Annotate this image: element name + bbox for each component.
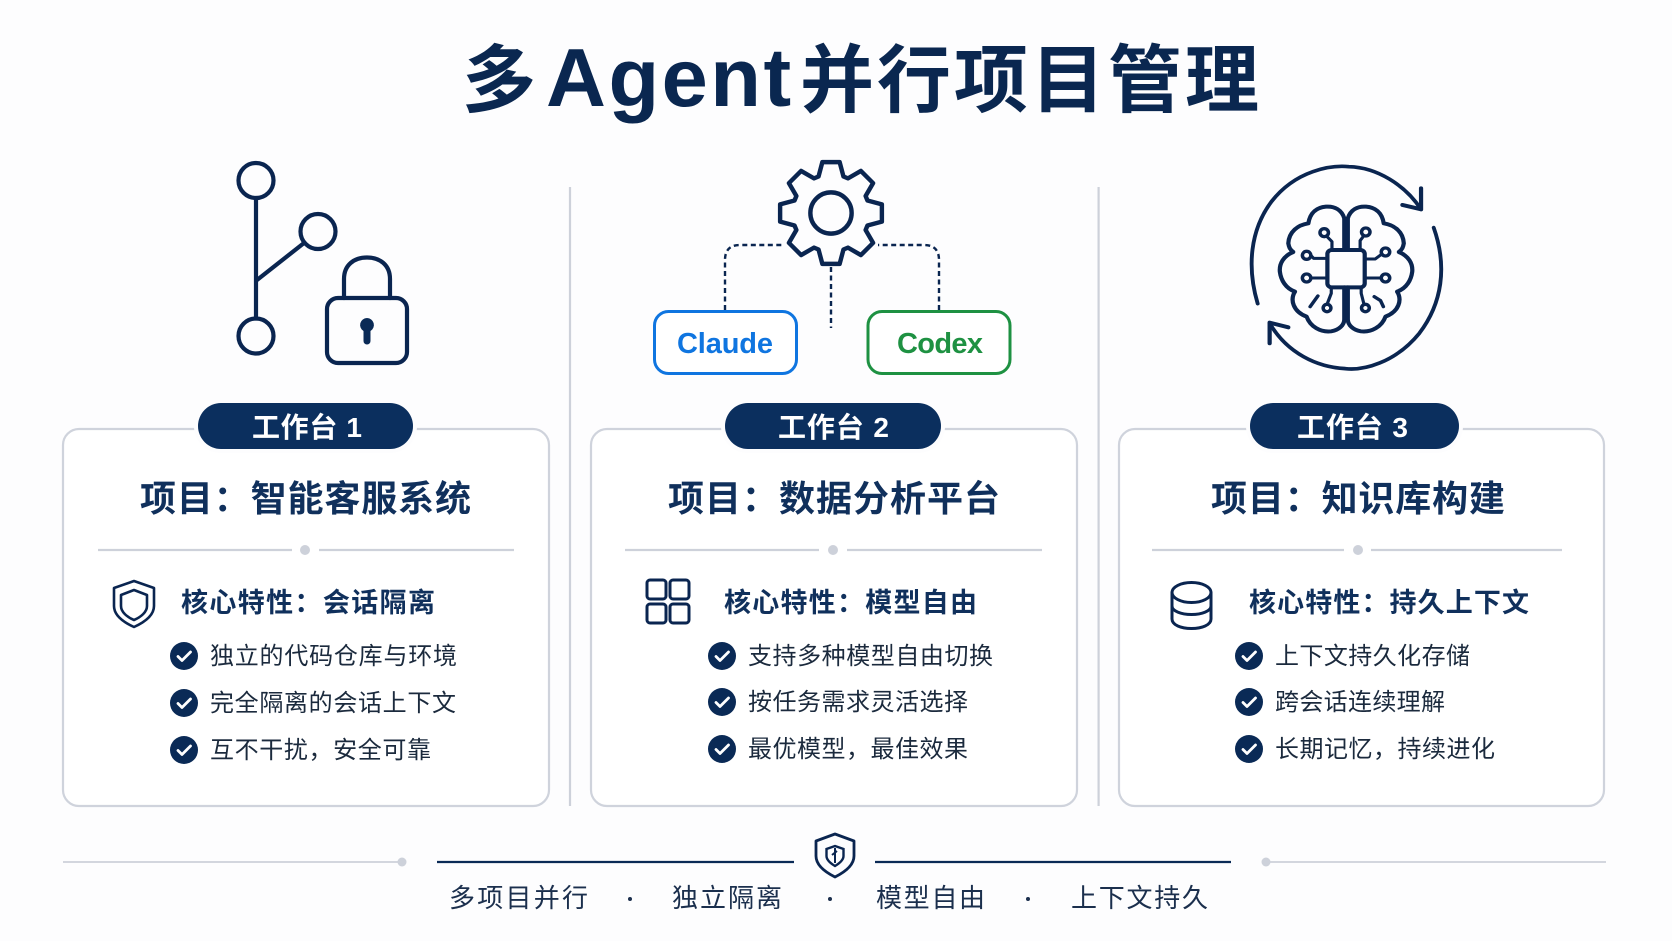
box: Claude xyxy=(654,312,796,374)
badge: workstation 1: 工作台 1 xyxy=(252,411,362,443)
title xyxy=(462,31,1259,124)
badge: workstation 2: 工作台 2 xyxy=(778,411,889,443)
feature list: 支持多种模型自由切换 xyxy=(748,643,993,670)
gear xyxy=(780,162,882,264)
badge: workstation 3 xyxy=(1250,403,1459,449)
icon: grid xyxy=(647,580,689,623)
title: 多 xyxy=(462,39,536,122)
column divider: right xyxy=(1097,187,1100,806)
panel: workstation 1 xyxy=(63,403,549,806)
column divider: left xyxy=(569,187,571,806)
badge: workstation 1 xyxy=(198,403,413,449)
feature list xyxy=(1235,642,1495,763)
footer xyxy=(63,834,1606,913)
feature list xyxy=(708,642,993,763)
feature list xyxy=(170,642,457,764)
feature list: 跨会话连续理解 xyxy=(1275,689,1445,716)
footer keywords: 上下文持久 xyxy=(1071,883,1208,913)
box: Codex: Codex xyxy=(897,328,983,360)
footer keywords: 模型自由 xyxy=(876,883,985,913)
icon: footer shield xyxy=(816,834,854,877)
panel: workstation 2 xyxy=(591,403,1077,806)
project title: 项目：智能客服系统 xyxy=(140,478,471,519)
feature list: 完全隔离的会话上下文 xyxy=(210,690,456,717)
feature list: 按任务需求灵活选择 xyxy=(748,689,968,716)
footer keywords: 独立隔离 xyxy=(672,883,782,913)
dashed connectors xyxy=(725,245,939,328)
icon: gear connected to models xyxy=(654,162,1010,374)
box: Codex xyxy=(868,312,1010,374)
icon: brain chip with cycle arrows xyxy=(1252,166,1441,369)
title: Agent xyxy=(546,31,794,124)
box: Claude: Claude xyxy=(677,328,773,360)
project title: 项目：数据分析平台 xyxy=(668,478,1000,519)
feature list: 互不干扰，安全可靠 xyxy=(210,737,431,764)
badge: workstation 2 xyxy=(725,403,941,449)
icon: git branch with padlock xyxy=(238,163,407,363)
icon: shield xyxy=(114,581,154,627)
feature heading: 核心特性：持久上下文 xyxy=(1249,588,1529,618)
footer keywords xyxy=(449,883,1208,913)
feature heading: 核心特性：会话隔离 xyxy=(181,588,435,618)
feature list: 独立的代码仓库与环境 xyxy=(210,643,457,670)
project title: 项目：知识库构建 xyxy=(1211,478,1505,519)
badge: workstation 3: 工作台 3 xyxy=(1297,411,1408,443)
feature heading: 核心特性：模型自由 xyxy=(724,588,977,618)
panel: workstation 3 xyxy=(1119,403,1604,806)
footer keywords: 多项目并行 xyxy=(449,883,588,913)
title: 并行项目管理 xyxy=(800,39,1259,122)
feature list: 上下文持久化存储 xyxy=(1275,643,1470,670)
icon: database xyxy=(1172,582,1211,628)
feature list: 长期记忆，持续进化 xyxy=(1275,736,1495,763)
feature list: 最优模型，最佳效果 xyxy=(748,736,968,763)
